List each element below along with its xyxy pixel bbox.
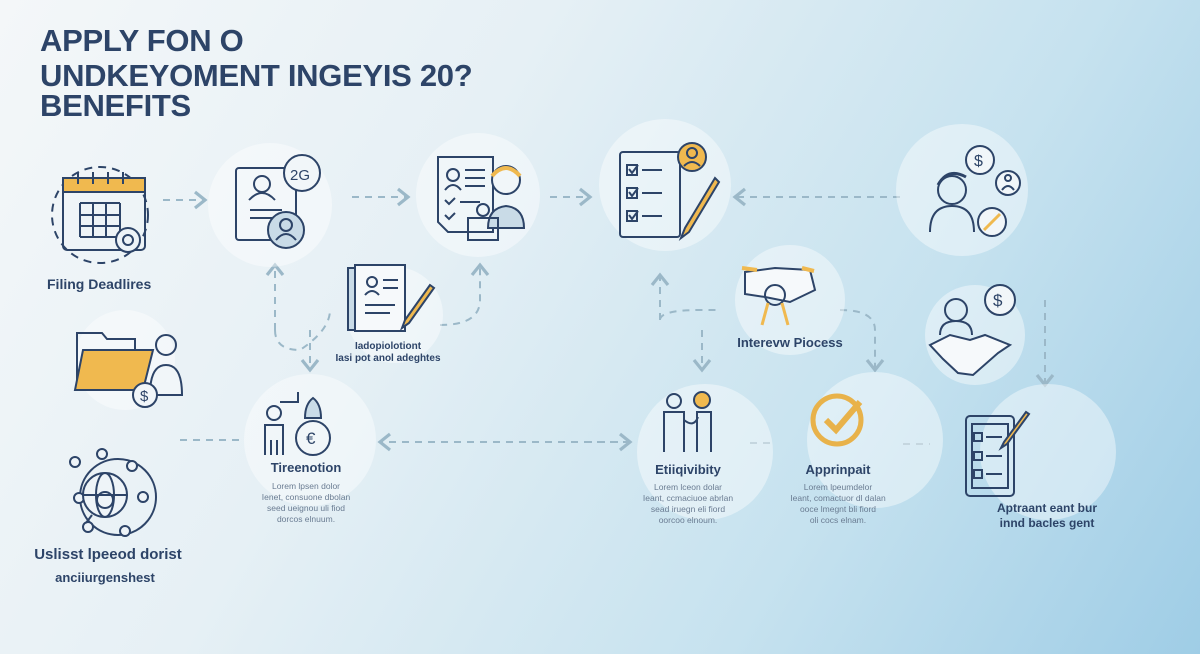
icon: check circle: [813, 396, 861, 444]
step: approval: ooce lmegnt bli fiord: [800, 504, 876, 514]
icon: handshake with money: [930, 285, 1015, 375]
step circles: [75, 119, 1116, 520]
label: interview process: Interevw Piocess: [737, 335, 843, 350]
step: tirenotion: Lorem lpsen dolor: [272, 481, 340, 491]
step: final: innd bacles gent: [1000, 516, 1094, 530]
step: eligibility: oorcoo elnoum.: [659, 515, 717, 525]
step: eligibility: Etiiqivibity: [655, 462, 722, 477]
step: tirenotion: Tireenotion: [271, 460, 341, 475]
icon: person with money: [930, 146, 1020, 236]
title: APPLY FON O: [40, 23, 243, 58]
icon: profile card: [236, 155, 320, 248]
icon: folder: [75, 333, 182, 407]
step: approval: Apprinpait: [806, 462, 871, 477]
icon: checklist tablet: [966, 412, 1029, 496]
icon: resume with person: [438, 157, 524, 240]
icon: two people: [664, 392, 711, 452]
icon: award handshake: [742, 268, 815, 325]
icon: document and pencil: [348, 265, 434, 331]
label: globe: Uslisst lpeeod dorist: [34, 546, 182, 563]
step: eligibility: Ieant, ccmaciuoe abrlan: [643, 493, 733, 503]
icon: handshake with money: $: [993, 291, 1003, 310]
step: approval: Ieant, comactuor dl dalan: [790, 493, 886, 503]
step: eligibility: [643, 462, 733, 525]
step: final: Aptraant eant bur: [997, 501, 1097, 515]
label: middle doc: Iadopiolotiont: [355, 341, 422, 352]
icon: network globe: [70, 449, 156, 536]
label: middle doc: Iasi pot anol adeghtes: [335, 353, 441, 364]
label: filing deadlines: Filing Deadlires: [47, 276, 151, 292]
connector arrows: [163, 197, 1045, 444]
title: [40, 23, 472, 123]
icon: calendar: [52, 167, 148, 263]
label: globe: [34, 546, 182, 585]
icon: person with euro: €: [306, 429, 316, 448]
step: final: [997, 501, 1097, 530]
label: globe: anciiurgenshest: [55, 570, 156, 585]
step: approval: [790, 462, 886, 525]
title: UNDKEYOMENT INGEYIS 20?: [40, 58, 472, 93]
step: approval: Lorem lpeumdelor: [804, 482, 872, 492]
label: middle doc: [335, 341, 441, 364]
step: tirenotion: seed ueignou uli fiod: [267, 503, 345, 513]
icon: checklist with pencil: [620, 143, 719, 238]
step: tirenotion: Ienet, consuone dbolan: [262, 492, 350, 502]
icon: person with money: $: [974, 153, 983, 170]
step: approval: oli cocs elnam.: [810, 515, 866, 525]
step: eligibility: Lorem lceon dolar: [654, 482, 722, 492]
icon: person with euro: [265, 392, 330, 455]
step: tirenotion: dorcos elnuum.: [277, 514, 335, 524]
title: BENEFITS: [40, 88, 191, 123]
icon: folder: $: [140, 388, 149, 405]
step: eligibility: sead iruegn eli fiord: [651, 504, 725, 514]
step: tirenotion: [262, 460, 350, 524]
icon: profile card: 2G: [290, 167, 310, 184]
